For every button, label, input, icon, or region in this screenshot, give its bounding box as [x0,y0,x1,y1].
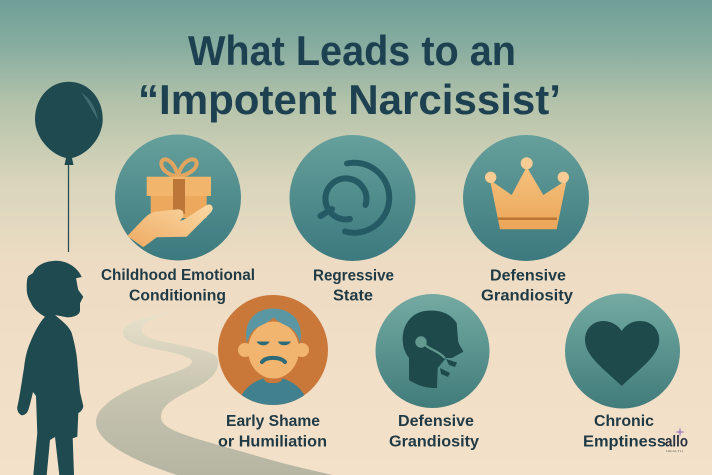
label: regressive state: Regressive [313,268,394,284]
icon: sad face [238,308,309,405]
title: What Leads to an [188,27,516,74]
panel: regressive state [290,135,416,304]
title [138,27,561,123]
panel: defensive grandiosity top [463,135,589,304]
label: early shame or humiliation: or Humiliation [218,434,327,450]
label: defensive grandiosity top: Grandiosity [481,288,573,304]
label: chronic emptiness: Emptiness [583,434,666,450]
label: early shame or humiliation [218,413,327,450]
label: defensive grandiosity bottom [389,413,479,450]
label: defensive grandiosity bottom: Grandiosity [389,434,479,450]
panel: childhood emotional conditioning [101,134,255,304]
logo: allo health: HEALTH [666,449,683,453]
icon: heart [585,321,659,386]
icon: head profile [403,311,463,388]
label: childhood emotional conditioning: Conditioning [129,288,226,304]
label: regressive state [313,268,394,304]
label: chronic emptiness [583,413,666,450]
label: chronic emptiness: Chronic [594,413,654,430]
balloon with string [35,82,103,252]
panel: early shame or humiliation [218,295,328,450]
boy silhouette [17,261,83,475]
logo: allo health: allo [665,434,688,450]
title: “Impotent Narcissist’ [138,76,561,123]
panel: defensive grandiosity bottom [376,294,490,450]
label: defensive grandiosity top: Defensive [490,268,566,284]
icon: gift in hand [127,159,213,247]
label: regressive state: State [333,288,373,304]
label: childhood emotional conditioning [101,267,255,304]
logo: allo health [665,427,688,453]
icon: crown [485,157,569,229]
winding road [96,312,333,475]
panel: chronic emptiness [565,294,680,450]
icon: spiral magnifier [320,163,389,233]
label: childhood emotional conditioning: Childhood Emotional [101,267,255,284]
label: defensive grandiosity bottom: Defensive [398,413,474,430]
label: early shame or humiliation: Early Shame [226,413,320,430]
label: defensive grandiosity top [481,268,573,304]
